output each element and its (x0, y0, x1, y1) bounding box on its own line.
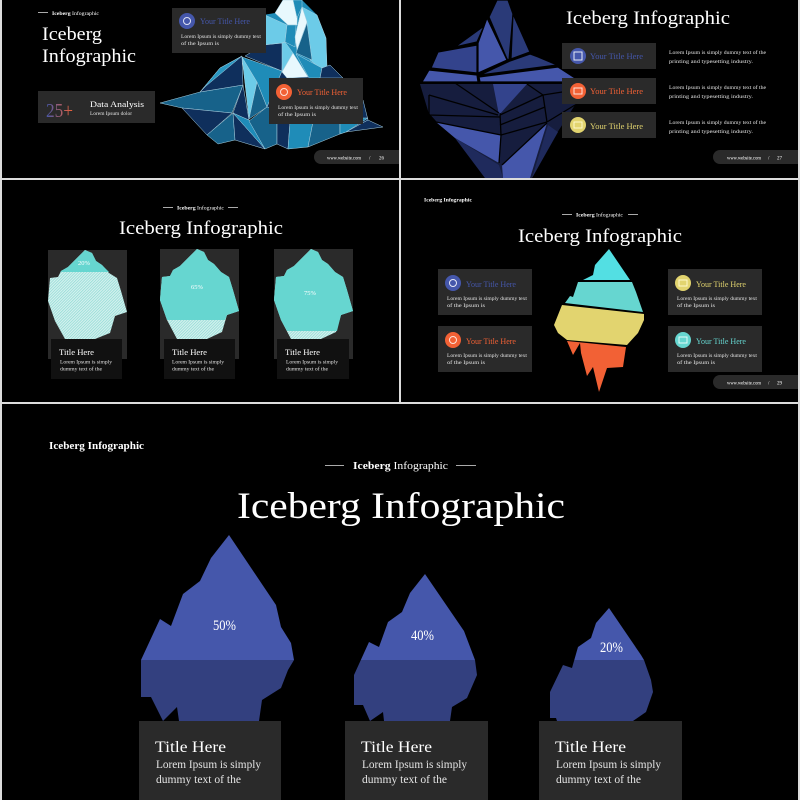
row: blue item: Lorem Ipsum is simply dummy text of the (669, 49, 767, 56)
card: blue: Lorem Ipsum is simply dummy text (447, 296, 527, 302)
card: teal: Your Title Here (696, 337, 746, 346)
card: orange callout: Your Title Here (297, 88, 347, 97)
row: orange item: Your Title Here (590, 87, 643, 96)
item: 20 percent: Lorem Ipsum is simply (60, 360, 112, 366)
item: 20 percent: 20% (78, 260, 91, 267)
card: blue (438, 269, 532, 315)
row: yellow item: Your Title Here (590, 122, 643, 131)
row: blue item: printing and typesetting industry. (669, 59, 754, 65)
card: blue callout: of the Ipsum is (181, 40, 219, 47)
card: orange: Your Title Here (466, 337, 516, 346)
card: data analysis (38, 91, 155, 123)
card: data analysis: Lorem Ipsum dolor (90, 111, 132, 117)
page pill 26: www.website.com (327, 156, 361, 162)
item: 50 percent iceberg: 50% (213, 618, 236, 634)
page pill 29: www.website.com (727, 382, 761, 386)
item: 75 percent: Title Here (285, 348, 320, 357)
card: orange callout: Lorem Ipsum is simply dummy text (278, 105, 358, 111)
card: blue: Your Title Here (466, 280, 516, 289)
item: 75 percent: Lorem Ipsum is simply (286, 360, 338, 366)
page pill 27: www.website.com (727, 156, 761, 162)
icon: four-layer iceberg (554, 249, 644, 392)
row: blue item (562, 43, 767, 69)
slide 26 title: Infographic (42, 46, 136, 67)
card: orange: Lorem Ipsum is simply dummy text (447, 353, 527, 359)
card: blue callout: Your Title Here (200, 17, 250, 26)
page pill 26: / (369, 156, 371, 162)
card: blue callout: Lorem Ipsum is simply dummy text (181, 34, 261, 40)
panel: slide 27 faceted iceberg (401, 0, 798, 178)
icon: low-poly iceberg (160, 0, 383, 149)
item: 20 percent iceberg: Lorem Ipsum is simply (556, 759, 661, 771)
card: orange (438, 326, 532, 372)
page pill 29 (713, 375, 798, 389)
kicker: Iceberg Infographic (353, 461, 448, 472)
header tag: Iceberg Infographic (49, 441, 144, 452)
slide 28 title: Iceberg Infographic (119, 218, 283, 239)
item: 40 percent iceberg: Title Here (361, 739, 432, 756)
page pill 26: 26 (379, 156, 384, 162)
item: 65 percent: dummy text of the (172, 366, 215, 372)
item: 20 percent iceberg: Title Here (555, 739, 626, 756)
item: 75 percent: 75% (304, 290, 317, 297)
item: 20 percent iceberg: 20% (600, 640, 623, 656)
panel: large slide comparison (2, 404, 798, 800)
slide 26 kicker: Iceberg Infographic (52, 10, 100, 17)
main title: Iceberg Infographic (237, 486, 565, 527)
slide 28 kicker (163, 204, 238, 212)
item: 65 percent: 65% (191, 284, 204, 291)
item: 50 percent iceberg: Title Here (155, 739, 226, 756)
item: 75 percent (274, 249, 353, 379)
card: yellow: of the Ipsum is (677, 302, 715, 309)
item: 40 percent iceberg: 40% (411, 628, 434, 644)
item: 50 percent iceberg: Lorem Ipsum is simply (156, 759, 261, 771)
card: yellow: Your Title Here (696, 280, 746, 289)
item: 20 percent iceberg: dummy text of the (556, 774, 641, 786)
row: orange item: Lorem Ipsum is simply dummy text of the (669, 84, 767, 91)
card: blue callout (172, 8, 266, 53)
card: teal: Lorem Ipsum is simply dummy text (677, 353, 757, 359)
card: yellow: Lorem Ipsum is simply dummy text (677, 296, 757, 302)
panel: slide 29 layered iceberg (401, 180, 798, 402)
row: blue item: Your Title Here (590, 52, 643, 61)
item: 75 percent: dummy text of the (286, 366, 329, 372)
item: 40 percent iceberg (345, 574, 488, 800)
card: orange callout (269, 78, 363, 124)
card: teal: of the Ipsum is (677, 359, 715, 366)
row: yellow item: printing and typesetting industry. (669, 129, 754, 135)
card: yellow (668, 269, 762, 315)
panel: slide 26 low-poly iceberg (2, 0, 409, 178)
page pill 26 (314, 150, 399, 164)
card: data analysis: Data Analysis (90, 99, 144, 109)
item: 40 percent iceberg: Lorem Ipsum is simply (362, 759, 467, 771)
row: orange item (562, 78, 767, 104)
icon: faceted blue iceberg (419, 0, 582, 178)
slide 28 kicker: Iceberg Infographic (177, 204, 225, 212)
slide 29 kicker (562, 212, 638, 218)
card: data analysis: 25+ (46, 100, 73, 122)
page pill 29: 29 (777, 382, 782, 386)
row: yellow item: Lorem Ipsum is simply dummy text of the (669, 119, 767, 126)
page pill 27: / (768, 156, 770, 162)
panel: slide 28 percentages (2, 180, 399, 402)
slide 26 title (42, 24, 136, 67)
row: orange item: printing and typesetting industry. (669, 94, 754, 100)
slide 26 kicker (38, 10, 100, 17)
item: 65 percent: Title Here (172, 348, 207, 357)
slide 29 title: Iceberg Infographic (518, 226, 682, 247)
item: 20 percent: dummy text of the (60, 366, 103, 372)
item: 40 percent iceberg: dummy text of the (362, 774, 447, 786)
slide 26 title: Iceberg (42, 24, 103, 45)
item: 65 percent: Lorem Ipsum is simply (172, 360, 224, 366)
card: orange callout: of the Ipsum is (278, 111, 316, 118)
page pill 27: 27 (777, 156, 782, 162)
item: 20 percent (48, 250, 127, 379)
card: orange: of the Ipsum is (447, 359, 485, 366)
slide 27 title: Iceberg Infographic (566, 8, 730, 29)
item: 50 percent iceberg (139, 535, 294, 800)
page pill 29: / (768, 382, 770, 386)
item: 20 percent iceberg (539, 608, 682, 800)
card: teal (668, 326, 762, 372)
slide 29 header tag: Iceberg Infographic (424, 198, 473, 204)
item: 50 percent iceberg: dummy text of the (156, 774, 241, 786)
card: blue: of the Ipsum is (447, 302, 485, 309)
slide 29 kicker: Iceberg Infographic (576, 212, 624, 218)
item: 65 percent (160, 249, 239, 379)
page pill 27 (713, 150, 798, 164)
row: yellow item (562, 112, 767, 138)
item: 20 percent: Title Here (59, 348, 94, 357)
